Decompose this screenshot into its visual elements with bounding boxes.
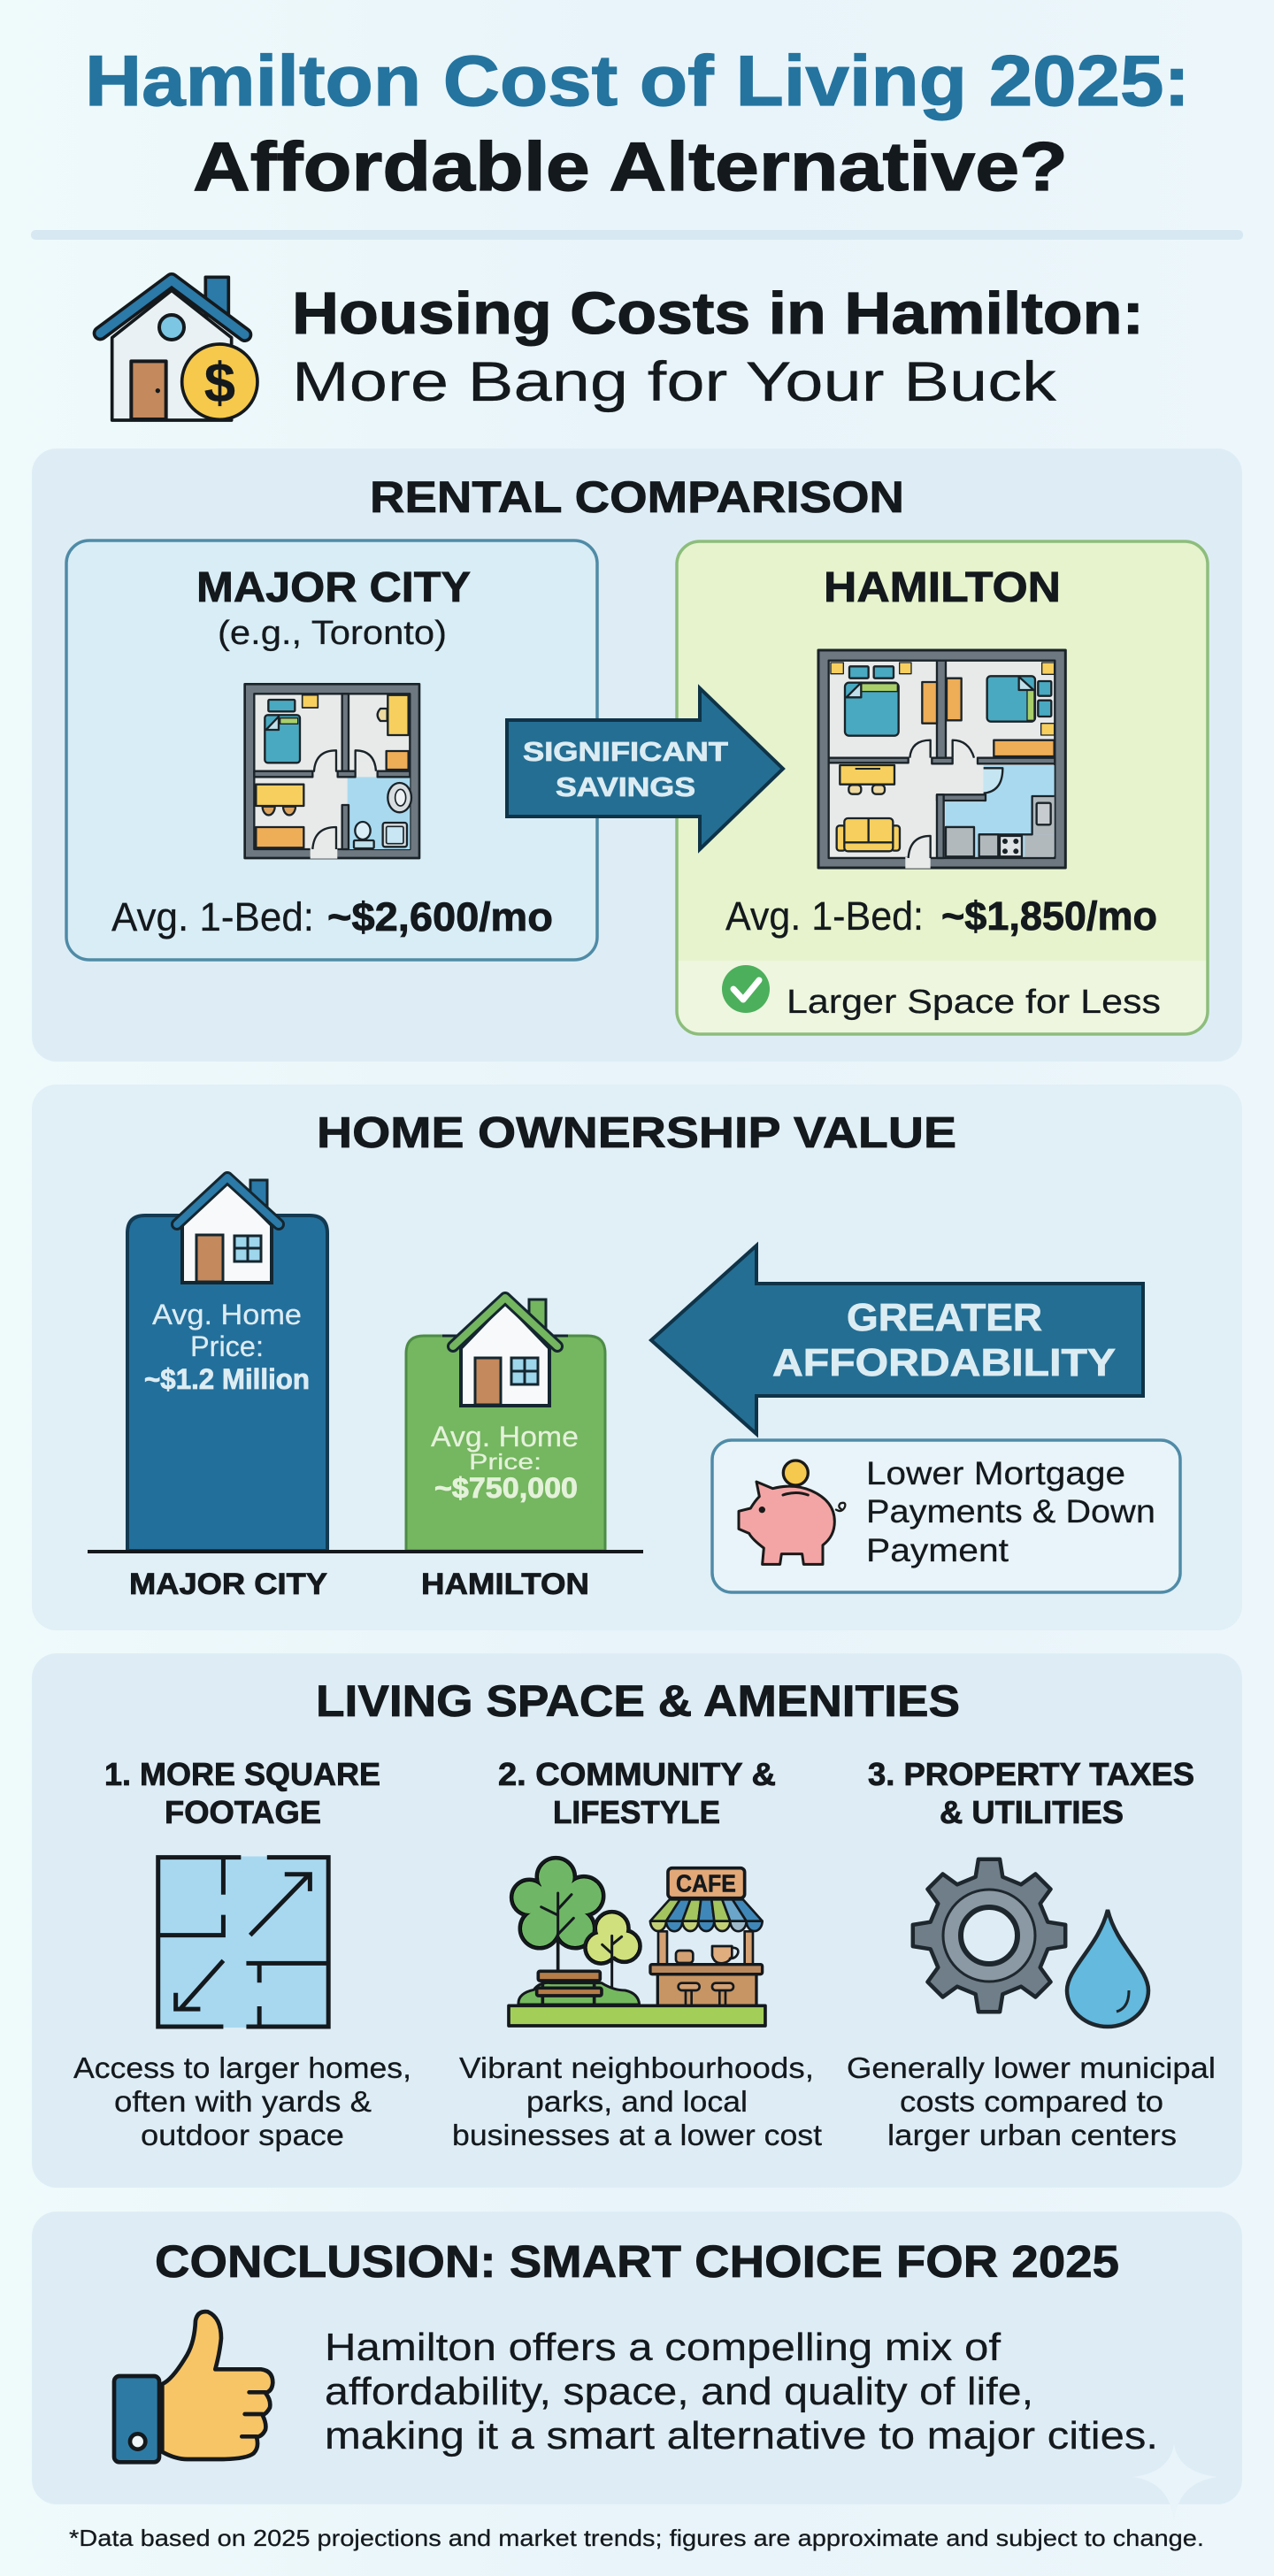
axis labels: MAJOR CITY — [129, 1568, 327, 1601]
icon: house with dollar coin: $ — [204, 352, 235, 414]
panel: living space and amenities — [32, 1653, 1242, 2188]
icon: thumbs up — [114, 2312, 272, 2462]
column: community and lifestyle: parks, and local — [526, 2085, 748, 2118]
card: major city: Avg. 1-Bed: — [111, 894, 314, 939]
floor plan: larger apartment — [818, 650, 1065, 869]
heading: living space and amenities: LIVING SPACE & AMENITIES — [316, 1676, 960, 1726]
footnote: *Data based on 2025 projections and market trends; figures are approximate and subject to change. — [69, 2525, 1204, 2551]
bar: hamilton home price: Avg. Home — [431, 1421, 579, 1453]
card: major city — [66, 540, 597, 960]
section heading: housing costs — [292, 280, 1144, 413]
column: more square footage — [73, 1756, 411, 2151]
bar: major city home price: Avg. Home — [152, 1299, 302, 1330]
icon: floor plan with expansion arrows — [158, 1856, 328, 2028]
axis labels: HAMILTON — [421, 1568, 589, 1601]
icon: piggy bank — [739, 1460, 845, 1564]
conclusion text: making it a smart alternative to major cities. — [325, 2414, 1158, 2457]
card: major city: ~$2,600/mo — [327, 894, 553, 939]
column: community and lifestyle: Vibrant neighbourhoods, — [459, 2051, 814, 2084]
title — [85, 42, 1190, 205]
arrow: significant savings — [507, 688, 783, 849]
arrow: greater affordability: GREATER — [847, 1296, 1042, 1339]
bar: hamilton home price: ~$750,000 — [434, 1472, 578, 1504]
icon: house with dollar coin — [100, 277, 257, 420]
panel: rental comparison — [32, 448, 1242, 1062]
section heading: housing costs: Housing Costs in Hamilton: — [292, 280, 1144, 347]
card: major city: (e.g., Toronto) — [218, 615, 447, 652]
panel: conclusion — [32, 2212, 1242, 2504]
title: Affordable Alternative? — [193, 127, 1068, 205]
column: more square footage: FOOTAGE — [165, 1794, 321, 1830]
icon: park and cafe: CAFE — [676, 1870, 736, 1898]
card: hamilton: Larger Space for Less — [787, 984, 1161, 1021]
title: Hamilton Cost of Living 2025: — [85, 42, 1190, 121]
bar: hamilton home price: Price: — [469, 1450, 541, 1475]
card: major city: MAJOR CITY — [196, 564, 471, 611]
callout: lower mortgage payments: Payments & Down — [866, 1493, 1155, 1530]
icon: park and cafe — [509, 1858, 765, 2026]
column: more square footage: 1. MORE SQUARE — [104, 1756, 380, 1792]
column: more square footage: often with yards & — [114, 2085, 372, 2118]
column: community and lifestyle — [452, 1756, 822, 2151]
arrow: greater affordability — [651, 1246, 1143, 1434]
column: property taxes and utilities — [847, 1756, 1216, 2151]
arrow: significant savings: SIGNIFICANT — [523, 736, 728, 767]
column: property taxes and utilities: Generally lower municipal — [847, 2051, 1216, 2084]
callout: lower mortgage payments: Lower Mortgage — [866, 1455, 1125, 1491]
bar: major city home price: ~$1.2 Million — [144, 1363, 310, 1395]
column: property taxes and utilities: 3. PROPERTY TAXES — [868, 1756, 1194, 1792]
column: property taxes and utilities: larger urban centers — [887, 2119, 1177, 2151]
column: property taxes and utilities: costs compared to — [900, 2085, 1163, 2118]
callout: lower mortgage payments — [712, 1440, 1180, 1592]
axis labels — [129, 1568, 589, 1601]
arrow: significant savings: SAVINGS — [556, 771, 695, 802]
heading: conclusion: CONCLUSION: SMART CHOICE FOR 2025 — [155, 2236, 1119, 2287]
column: more square footage: Access to larger homes, — [73, 2051, 411, 2084]
card: hamilton: HAMILTON — [824, 564, 1061, 611]
conclusion text — [325, 2326, 1158, 2457]
column: community and lifestyle: 2. COMMUNITY & — [498, 1756, 776, 1792]
section heading: housing costs: More Bang for Your Buck — [292, 351, 1057, 413]
card: hamilton — [677, 541, 1208, 1034]
column: community and lifestyle: LIFESTYLE — [553, 1794, 720, 1830]
arrow: greater affordability: AFFORDABILITY — [772, 1341, 1116, 1384]
callout: lower mortgage payments: Payment — [866, 1532, 1009, 1568]
conclusion text: Hamilton offers a compelling mix of — [325, 2326, 1002, 2369]
icon: gear and water drop — [913, 1859, 1148, 2027]
floor plan: small apartment — [245, 684, 419, 859]
column: community and lifestyle: businesses at a lower cost — [452, 2119, 822, 2151]
conclusion text: affordability, space, and quality of life, — [325, 2370, 1033, 2413]
icon: check mark — [722, 965, 770, 1013]
heading: home ownership value: HOME OWNERSHIP VALUE — [317, 1109, 956, 1157]
card: hamilton: Avg. 1-Bed: — [725, 893, 924, 939]
column: more square footage: outdoor space — [141, 2119, 344, 2151]
bar: major city home price: Price: — [190, 1330, 264, 1362]
bar: major city home price — [127, 1177, 327, 1551]
column: property taxes and utilities: & UTILITIES — [940, 1794, 1124, 1830]
heading: rental comparison: RENTAL COMPARISON — [370, 472, 904, 522]
card: hamilton: ~$1,850/mo — [941, 893, 1157, 939]
panel: home ownership value — [32, 1085, 1242, 1630]
bar: hamilton home price — [406, 1298, 605, 1551]
